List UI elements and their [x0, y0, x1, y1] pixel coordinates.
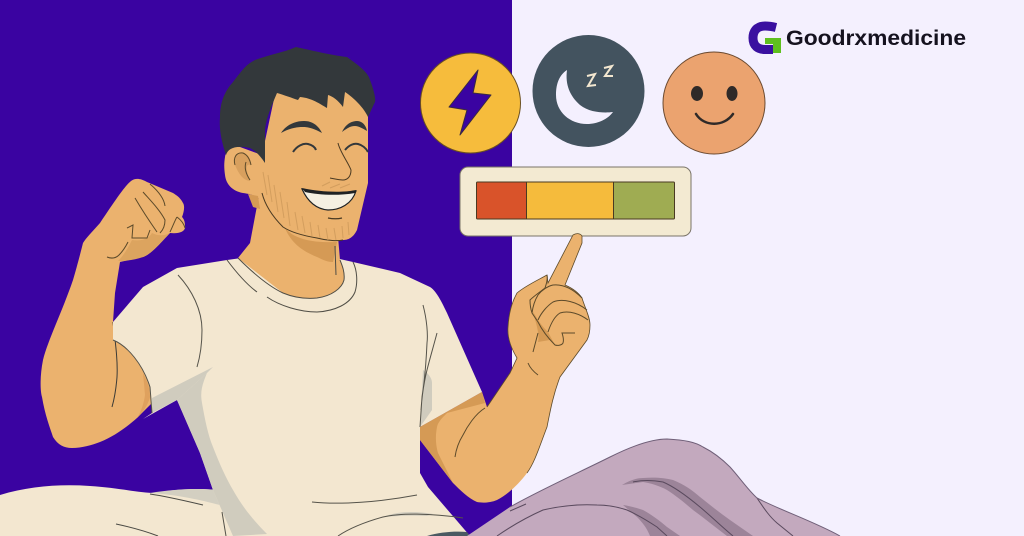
- waistband: [427, 532, 470, 536]
- logo: [753, 26, 966, 53]
- nose: [330, 143, 351, 180]
- panel: left purple background: [0, 0, 512, 536]
- biceps crease: [112, 322, 117, 407]
- fist lines: [107, 184, 185, 258]
- icon: sleep moon: [532, 35, 644, 147]
- hand lines: [455, 275, 588, 457]
- man: right forearm and pointing hand: [420, 234, 590, 503]
- finger shadow: [532, 310, 555, 345]
- icon: smiley face: [663, 52, 765, 154]
- man: neck: [227, 190, 357, 312]
- stubble: [263, 172, 350, 240]
- left bed sheet: [0, 485, 240, 536]
- hair: [220, 47, 375, 163]
- smile: [302, 189, 356, 210]
- collar: [227, 246, 357, 312]
- mood meter: [460, 167, 691, 236]
- man: t-shirt: [113, 250, 482, 536]
- eyebrows: [281, 121, 322, 133]
- ear detail: [234, 153, 251, 181]
- shirt shading: [177, 373, 267, 536]
- face: [224, 85, 368, 240]
- logo mark: [753, 26, 781, 53]
- arm shadows: [137, 373, 150, 418]
- icon: energy bolt: [420, 53, 520, 153]
- logo wordmark: Goodrxmedicine: [786, 27, 966, 50]
- purple blanket: [467, 439, 840, 536]
- shirt lines: [178, 275, 463, 536]
- man: raised left arm: [41, 179, 185, 448]
- man: head: [220, 47, 375, 241]
- forearm shadow: [420, 392, 485, 483]
- closed eyes: [293, 144, 368, 152]
- hand outline: [487, 234, 590, 473]
